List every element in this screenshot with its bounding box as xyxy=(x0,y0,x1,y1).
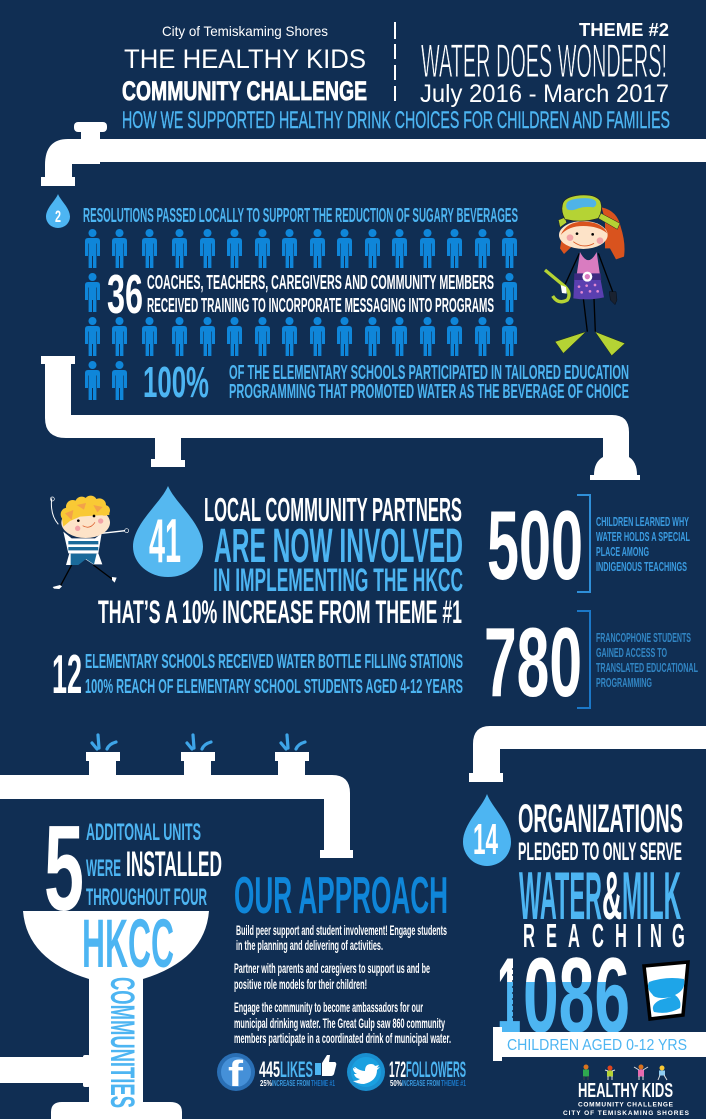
top tap pipe xyxy=(41,122,706,186)
our approach: Build peer support and student involvement! Engage students xyxy=(236,923,447,938)
drinking fountain xyxy=(0,905,209,1119)
1086 children stat: 1 xyxy=(497,935,521,1055)
twitter stat: 50% xyxy=(390,1079,402,1088)
fountain units stat: THROUGHOUT FOUR xyxy=(86,884,207,911)
facebook stat: LIKES xyxy=(280,1057,313,1082)
facebook stat: INCREASE FROM xyxy=(272,1079,310,1088)
780 stat: PROGRAMMING xyxy=(596,676,652,690)
logo: healthy kids: CITY OF TEMISKAMING SHORES xyxy=(563,1110,690,1117)
logo: healthy kids: COMMUNITY CHALLENGE xyxy=(578,1102,674,1108)
training stat: 36 xyxy=(107,263,143,325)
header: program title: COMMUNITY CHALLENGE xyxy=(122,76,367,106)
facebook stat: 445 xyxy=(259,1057,280,1082)
resolutions stat: 2 xyxy=(55,207,61,226)
780 stat: 780 xyxy=(484,607,582,717)
filling stations stat: 12 xyxy=(52,643,82,705)
elementary schools stat: 100% xyxy=(143,358,209,407)
twitter stat: 172 xyxy=(389,1057,406,1082)
organizations stat: 14 xyxy=(473,815,498,864)
header: program title: THE HEALTHY KIDS xyxy=(124,44,366,74)
our approach xyxy=(234,867,451,1046)
500 stat: PLACE AMONG xyxy=(596,545,649,559)
header: program title xyxy=(122,23,367,106)
fountain units stat: ADDITONAL UNITS xyxy=(86,819,201,846)
illustration: girl with snorkel xyxy=(545,195,625,356)
partners stat with drop: 41 xyxy=(149,507,181,576)
filling stations stat xyxy=(52,643,463,705)
partners stat with drop xyxy=(98,486,463,630)
text: INSTALLED xyxy=(126,845,222,884)
facebook stat: THEME #1 xyxy=(311,1079,335,1088)
our approach: OUR APPROACH xyxy=(234,867,448,925)
text: FOLLOWERS xyxy=(406,1057,466,1082)
middle pipe xyxy=(41,356,640,480)
partners stat with drop: LOCAL COMMUNITY PARTNERS xyxy=(204,491,462,528)
1086 children stat: 086 xyxy=(523,935,630,1055)
resolutions stat xyxy=(46,194,518,228)
organizations stat: REACHING xyxy=(523,917,685,955)
people icon grid xyxy=(85,229,517,400)
our approach: in the planning and delivering of activities. xyxy=(236,938,383,953)
fountain units stat: 5 xyxy=(44,800,84,936)
bottom left pipe with three spouts xyxy=(0,752,353,858)
header: theme title xyxy=(420,20,669,108)
twitter stat: INCREASE FROM xyxy=(402,1079,440,1088)
1086 children stat: 086 xyxy=(523,935,630,1055)
facebook stat: 25% xyxy=(260,1079,272,1088)
organizations stat xyxy=(463,794,685,955)
1086 children stat: 1 xyxy=(497,935,521,1055)
our approach: positive role models for their children! xyxy=(234,977,367,992)
twitter stat xyxy=(347,1053,466,1091)
drinking fountain: HKCC xyxy=(82,905,174,982)
water splashes xyxy=(92,735,305,749)
500 stat: 500 xyxy=(487,490,583,600)
our approach: municipal drinking water. The Great Gulp saw 860 community xyxy=(234,1016,445,1031)
fountain units stat: WERE xyxy=(86,855,121,882)
facebook stat: f xyxy=(228,1053,244,1094)
our approach: members participate in a coordinated drink of municipal water. xyxy=(234,1031,451,1046)
elementary schools stat xyxy=(143,358,629,407)
right tap pipe xyxy=(469,726,706,782)
our approach: Partner with parents and caregivers to support us and be xyxy=(234,961,430,976)
our approach: Engage the community to become ambassadors for our xyxy=(234,1000,423,1015)
1086 children stat xyxy=(493,957,706,1061)
header: theme title: THEME #2 xyxy=(579,20,669,40)
training stat xyxy=(107,263,494,325)
partners stat with drop: IN IMPLEMENTING THE HKCC xyxy=(213,562,463,598)
header divider xyxy=(394,22,396,101)
facebook stat xyxy=(217,1053,336,1094)
header: program title: City of Temiskaming Shores xyxy=(162,23,328,39)
twitter stat: THEME #1 xyxy=(441,1079,466,1088)
icon: water glass xyxy=(644,962,688,1019)
1086 children stat: CHILDREN AGED 0-12 YRS xyxy=(507,1037,687,1054)
fountain units stat xyxy=(44,800,222,936)
header: theme title: July 2016 - March 2017 xyxy=(420,80,669,108)
logo: healthy kids xyxy=(563,1064,690,1117)
illustration: boy xyxy=(50,496,129,589)
partners stat with drop: ARE NOW INVOLVED xyxy=(214,520,463,573)
organizations stat: & xyxy=(602,858,622,934)
